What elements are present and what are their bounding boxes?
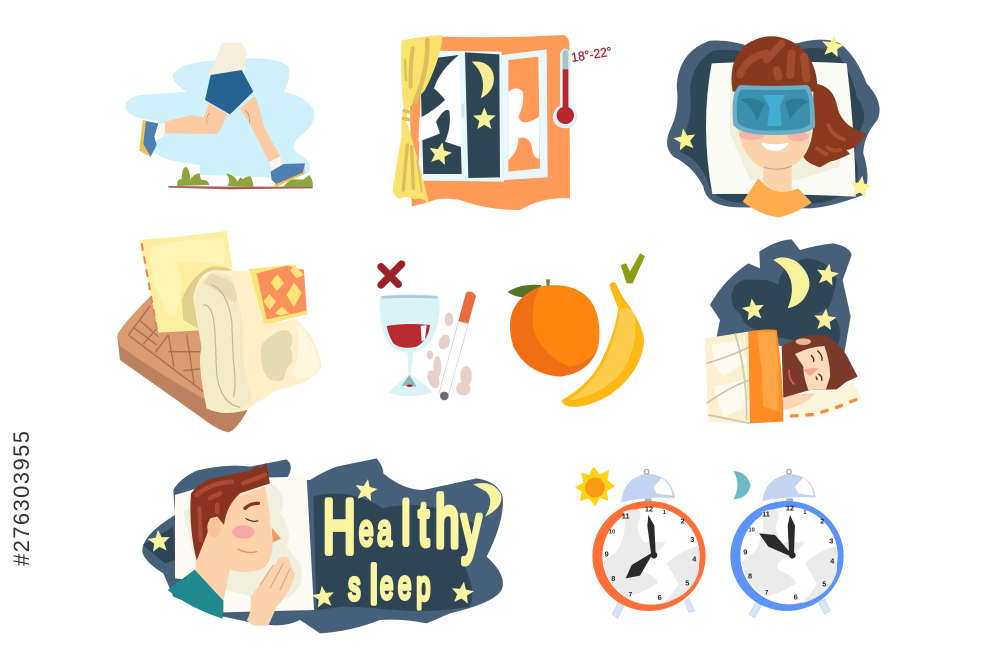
banner star [353,477,379,502]
curtain [393,35,442,204]
image id number: #276303955 [9,430,34,566]
clock rim [592,501,706,611]
clock bell [621,474,675,502]
panel: runner legs [125,43,314,189]
right pane with clouds [508,57,540,172]
blanket [705,332,750,423]
left window frame [418,51,504,182]
shirt [168,569,223,619]
star [672,127,698,151]
clock numerals: 3 [829,537,833,546]
center pane night [465,52,500,178]
blanket orange band [748,329,783,423]
temperature label: 18°-22° [570,44,613,65]
glass bowl [380,294,440,396]
clock numerals: 9 [743,547,747,556]
clock numerals: 1 [663,510,666,516]
thermometer [553,49,577,128]
grass [177,167,313,187]
thermometer tube [553,49,577,128]
torso [207,43,247,76]
cheeks [739,130,764,140]
face [795,346,830,390]
pillow shade [182,266,233,332]
healthy lettering: h [435,482,459,562]
star [813,307,837,330]
clock numerals: 12 [645,505,653,514]
clock numerals: 4 [692,555,697,564]
pillow [783,383,862,418]
ash [440,392,449,400]
clock numerals: 6 [794,592,798,601]
clock bell [762,474,816,501]
healthy lettering: l [402,491,410,557]
cigarette filter [458,292,476,323]
nose [272,527,281,543]
ear [207,517,221,537]
sleep lettering: l [370,557,377,615]
healthy lettering: a [377,506,392,555]
banner star [450,580,475,604]
window handle [462,103,464,117]
face [737,127,811,169]
pillow [175,477,314,612]
clock numerals: 9 [605,550,609,559]
ground line [168,186,313,189]
clock hands [626,515,657,578]
clock numerals [605,505,697,602]
leaf [508,285,542,297]
sun rays [575,467,615,507]
clock numerals: 3 [690,535,694,544]
hair ponytail [803,83,866,167]
panel: morning alarm clock [575,467,706,618]
panel: no wine or cigarettes [380,264,476,400]
panel: night window [393,35,577,210]
banana [562,282,644,407]
panel: evening alarm clock [730,469,844,618]
clock numerals [743,504,835,601]
clock numerals: 5 [822,580,826,589]
sky blob [125,58,314,177]
cigarette [439,292,476,400]
clock feet [749,599,830,618]
clock face [740,507,838,604]
right window frame [502,49,548,180]
orange wall [410,35,570,210]
cushion diamonds [263,266,304,316]
clock numerals: 11 [622,511,630,520]
hair highlights [740,43,807,78]
front leg [240,96,281,163]
mattress side [117,295,247,432]
sleep lettering: s [348,563,360,608]
blanket fold lines [203,285,240,407]
clock numerals: 11 [762,510,770,519]
mattress top [117,295,210,400]
clock numerals: 4 [830,556,835,565]
clock feet [612,598,694,618]
sleep lettering: e [398,562,411,607]
clock numerals: 8 [611,574,615,583]
patterned cushion [249,266,307,324]
cushion lattice [257,266,307,319]
pillow [706,62,856,197]
front shoe [274,166,305,187]
banana face [568,308,636,401]
moon [733,471,751,499]
clock numerals: 8 [748,571,752,580]
panel: sleeping person under night sky [705,239,862,423]
blanket lines [707,333,750,423]
clock rim [730,501,844,611]
sun [575,467,615,507]
clock numerals: 10 [749,527,755,533]
healthy lettering: t [419,489,429,558]
inner night [313,494,477,611]
clock numerals: 6 [658,593,662,602]
moon [773,257,809,308]
clock numerals: 1 [803,510,807,516]
hair [190,463,270,561]
healthy lettering: H [323,486,355,570]
stem [546,279,550,287]
blanket fold shading [195,272,253,410]
pillow stitching [142,243,157,332]
hand [247,557,295,626]
clock hands [759,515,796,559]
finger lines [260,563,290,590]
panel: orange and banana [508,253,645,407]
cigarette paper [439,322,468,395]
shirt [743,178,812,217]
mask nose bridge [763,95,785,126]
clock numerals: 5 [685,578,689,587]
face shading [742,509,837,603]
neck and face [195,487,273,601]
stem shadow [402,375,417,387]
night sky [710,239,852,355]
eyes [811,351,822,381]
wine [387,324,430,348]
face shading [603,509,699,603]
socks [155,123,283,170]
star [848,174,873,198]
clock numerals: 12 [786,504,794,513]
cross mark [381,264,402,285]
pillow dots [792,398,859,416]
arm [783,393,815,410]
clock numerals: 10 [609,530,615,536]
banner star [147,529,171,552]
healthy lettering: e [359,506,373,555]
neck [763,163,792,193]
head highlight [796,338,811,345]
smoke [425,313,472,395]
star [741,297,766,321]
star [820,33,846,58]
hair highlights [197,475,265,540]
check mark [621,253,645,283]
clock numerals: 7 [765,590,769,597]
closed eye [246,518,258,521]
night clouds [731,258,840,348]
curtain folds [403,40,427,192]
orange highlight [532,286,599,367]
star [473,107,496,129]
eyebrow [245,503,258,508]
cushion base [249,266,307,324]
wine glass [380,294,440,396]
inner night [680,48,864,203]
blanket [193,270,322,413]
smile [761,143,789,151]
hair and beard [782,335,858,398]
star [427,140,454,166]
mouth [789,370,794,384]
orange body [510,285,599,377]
left pane night [420,55,462,174]
healthy lettering: y [462,492,481,565]
crescent moon [472,61,494,98]
star [815,262,840,286]
hair top [732,36,817,92]
night blob [142,458,503,633]
quilt lines [128,306,205,392]
clock numerals: 2 [681,516,685,525]
clock numerals: 2 [820,517,824,526]
nose [803,368,818,377]
sleep lettering: p [416,564,430,610]
glass rim [382,295,437,299]
panel: healthy sleep banner [142,458,503,633]
banner moon [473,483,501,517]
clock face [602,507,700,605]
panel: woman in sleep mask [667,33,880,217]
rear leg [165,103,227,134]
banner star [311,584,336,608]
night blob [667,40,880,208]
shorts [205,70,253,114]
smile [238,549,257,552]
sleep mask [732,85,815,135]
panel: bed with pillow and blanket [117,231,322,432]
knee lines [207,110,250,123]
sleep lettering: e [380,562,393,607]
pillow shading [183,483,302,597]
pillow shading [730,77,840,180]
clock numerals: 7 [629,591,633,598]
cheek [232,525,255,539]
pillow [139,231,233,333]
rear shoe [139,120,152,157]
